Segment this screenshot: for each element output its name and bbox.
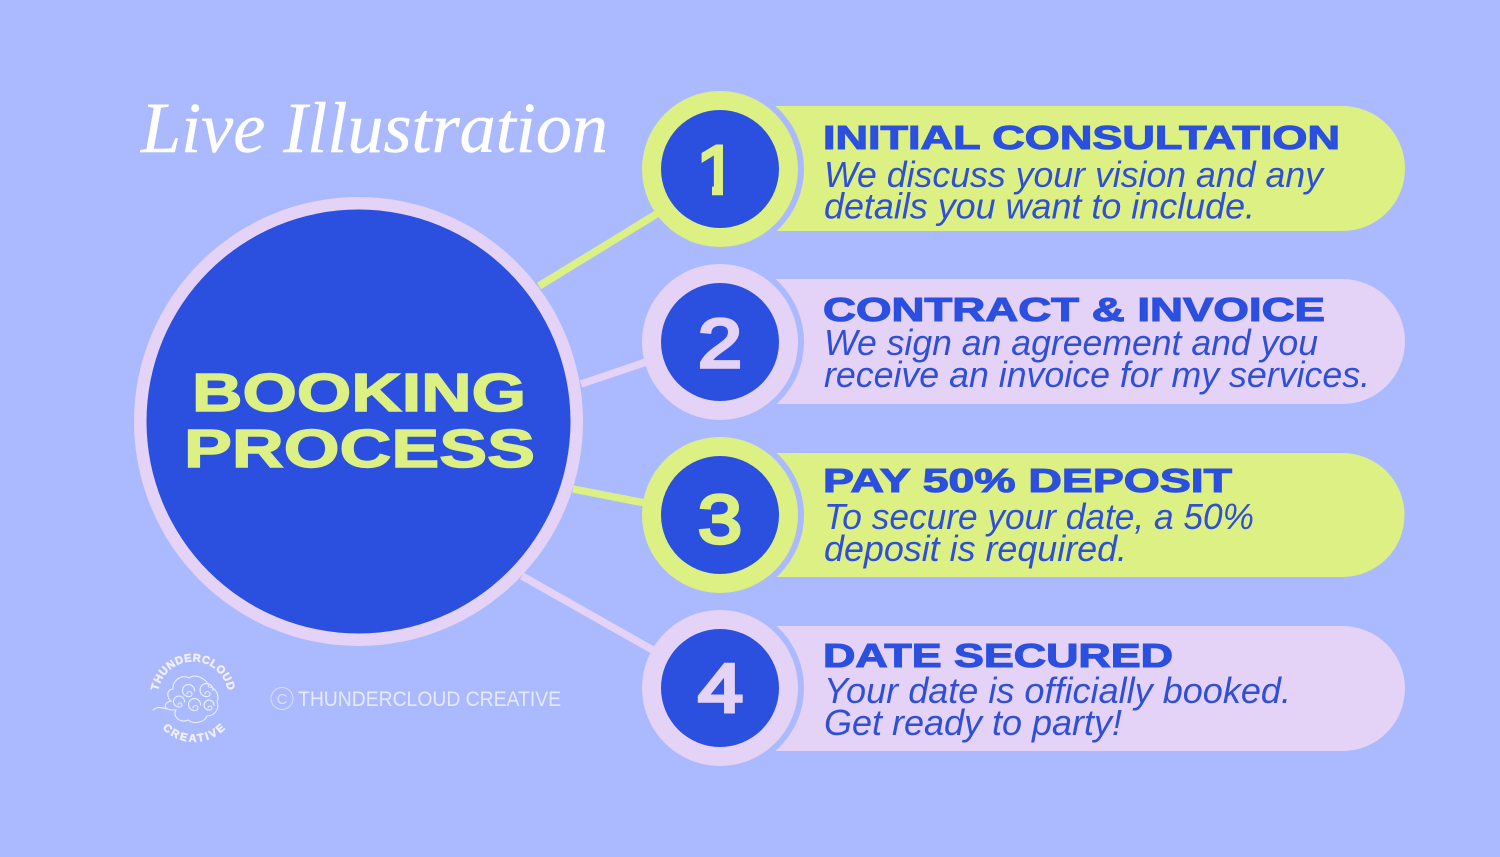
step number 1: 1 (696, 132, 740, 208)
hub heading (184, 363, 535, 479)
step 3 description (824, 496, 1254, 569)
step 3 description: deposit is required. (824, 528, 1127, 569)
hub heading: BOOKING (192, 363, 526, 423)
step 3 heading: PAY 50% DEPOSIT (823, 463, 1233, 500)
connector: hub to step 2 (581, 360, 652, 384)
logo wordmark (150, 654, 235, 742)
logo wordmark: CREATIVE (164, 723, 226, 742)
step 4 description (824, 670, 1291, 743)
step 1 description: details you want to include. (824, 186, 1255, 226)
step 1 heading: INITIAL CONSULTATION (823, 120, 1340, 157)
step number 4: 4 (698, 650, 743, 726)
step 1 description: We discuss your vision and any (824, 154, 1325, 195)
step 4 description: Get ready to party! (824, 702, 1122, 743)
step 2 description: receive an invoice for my services. (824, 354, 1370, 395)
copyright line: C (277, 691, 288, 708)
logo cloud icon (153, 676, 218, 723)
copyright line: THUNDERCLOUD CREATIVE (298, 688, 561, 711)
step number 2: 2 (698, 305, 742, 382)
step number 3: 3 (698, 481, 742, 558)
connector: hub to step 4 (522, 576, 658, 653)
logo wordmark: THUNDERCLOUD (150, 654, 235, 690)
connector: hub to step 1 (539, 207, 668, 286)
connector: hub to step 3 (573, 489, 650, 504)
central hub: booking process (134, 197, 583, 646)
step 1 description (824, 154, 1325, 226)
panel: step 1 initial consultation (636, 85, 1405, 253)
step 3 description: To secure your date, a 50% (824, 496, 1254, 537)
title: Live Illustration (140, 88, 608, 168)
step 2 description: We sign an agreement and you (824, 322, 1318, 363)
panel: step 2 contract and invoice (636, 258, 1405, 426)
logo: thundercloud creative badge (150, 654, 235, 742)
step 2 heading: CONTRACT & INVOICE (823, 292, 1325, 329)
step 4 heading: DATE SECURED (823, 638, 1173, 675)
panel: step 3 deposit (636, 431, 1404, 599)
step 2 description (824, 322, 1370, 395)
infographic canvas (134, 91, 1405, 766)
hub heading: PROCESS (184, 419, 535, 479)
panel: step 4 date secured (636, 604, 1405, 772)
step 4 description: Your date is officially booked. (824, 670, 1291, 711)
